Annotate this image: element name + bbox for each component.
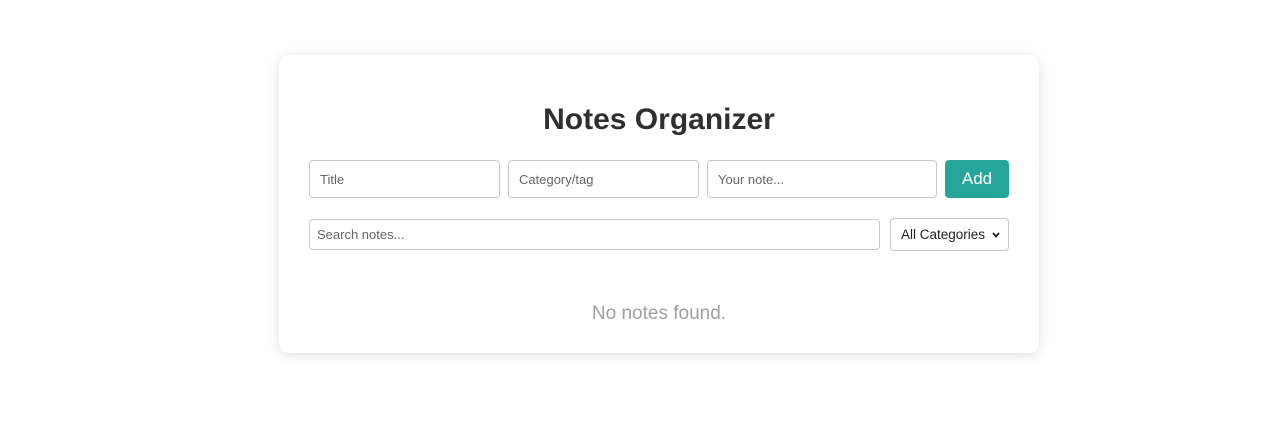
input: title: Title — [320, 172, 344, 186]
select: categories — [890, 218, 1009, 251]
input: category — [508, 160, 699, 198]
title: Notes Organizer — [543, 103, 775, 136]
select: categories: All Categories — [901, 227, 985, 242]
button: add — [945, 160, 1009, 198]
empty message: No notes found. — [592, 303, 726, 324]
input: note — [707, 160, 937, 198]
input: note: Your note... — [718, 172, 784, 186]
button: add: Add — [962, 169, 992, 188]
panel: notes card — [279, 55, 1039, 353]
input: search — [309, 219, 880, 250]
input: category: Category/tag — [519, 172, 593, 186]
input: title — [309, 160, 500, 198]
input: search: Search notes... — [317, 227, 404, 242]
